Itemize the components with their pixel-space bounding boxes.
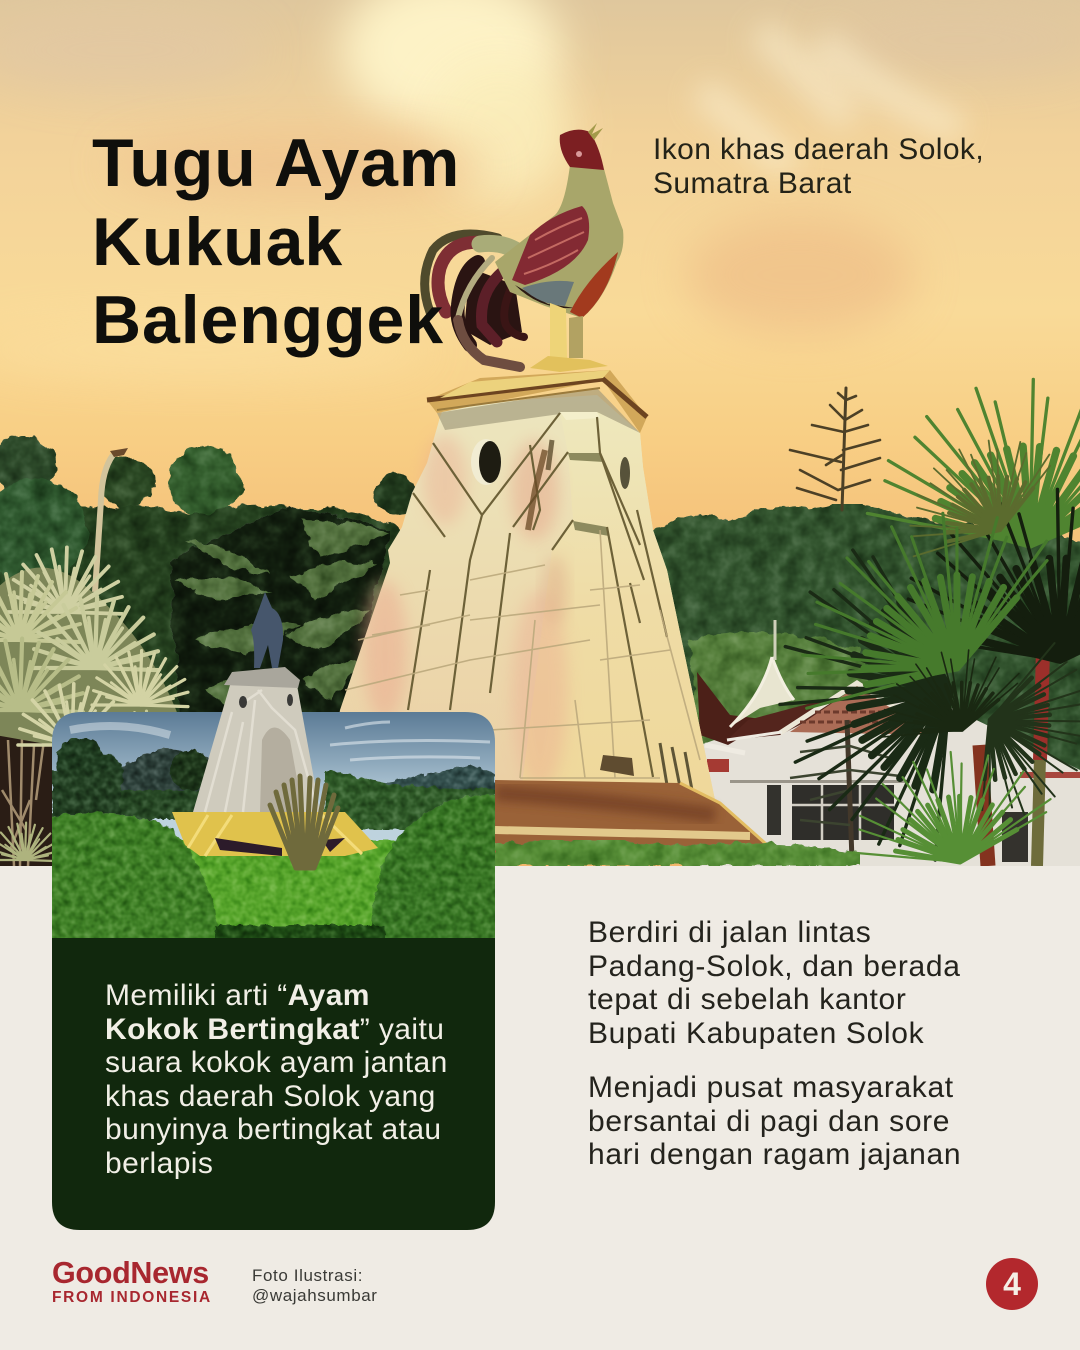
hedge at monument base bbox=[495, 840, 860, 866]
palm right bbox=[749, 370, 1080, 882]
text block: location bbox=[588, 916, 961, 1050]
hillside forest right bbox=[650, 504, 1080, 790]
text block: community centre bbox=[588, 1071, 961, 1171]
page number badge: 4 bbox=[1003, 1266, 1021, 1302]
card text: Kokok Bertingkat” yaitu bbox=[105, 1012, 444, 1046]
subtitle: Sumatra Barat bbox=[653, 166, 852, 200]
card text: Memiliki arti “Ayam bbox=[105, 979, 370, 1012]
logo: GoodNews from Indonesia bbox=[52, 1256, 212, 1306]
text block: location: Bupati Kabupaten Solok bbox=[588, 1017, 924, 1050]
title: Kukuak bbox=[92, 204, 343, 280]
lower green fan bbox=[836, 736, 1059, 881]
upper green fan bbox=[859, 370, 1080, 556]
card text: berlapis bbox=[105, 1146, 213, 1180]
head and comb bbox=[560, 130, 604, 170]
title bbox=[92, 125, 460, 358]
sky bbox=[0, 0, 1080, 866]
page number badge bbox=[986, 1258, 1038, 1310]
card bushes and lawn bbox=[40, 794, 500, 945]
card text bbox=[105, 979, 448, 1180]
dark mass bbox=[878, 475, 1080, 677]
spiky plant left bbox=[0, 547, 190, 866]
photo credit: @wajahsumbar bbox=[252, 1286, 378, 1305]
sparse pine right bbox=[790, 388, 880, 510]
logo: GoodNews from Indonesia: FROM INDONESIA bbox=[52, 1289, 212, 1306]
forest left bbox=[0, 435, 415, 740]
card photo bbox=[40, 712, 500, 945]
text block: community centre: bersantai di pagi dan sore bbox=[588, 1104, 950, 1138]
subtitle: Ikon khas daerah Solok, bbox=[653, 133, 984, 166]
dark lower fronds bbox=[756, 538, 979, 882]
monument cap bbox=[427, 370, 647, 433]
small monument above card bbox=[52, 592, 495, 1230]
card sky bbox=[52, 712, 495, 842]
olive left frond bbox=[878, 410, 1069, 576]
card text: suara kokok ayam jantan bbox=[105, 1046, 448, 1079]
card monument base steps bbox=[172, 812, 378, 856]
street lamp bbox=[95, 448, 128, 592]
stains and blush bbox=[512, 590, 568, 790]
title: Balenggek bbox=[92, 282, 444, 358]
logo: GoodNews from Indonesia: GoodNews bbox=[52, 1256, 209, 1290]
photo credit: Foto Ilustrasi: bbox=[252, 1266, 363, 1285]
main dark joints bbox=[408, 413, 667, 777]
text block: community centre: Menjadi pusat masyarakat bbox=[588, 1071, 954, 1104]
photo credit bbox=[252, 1266, 378, 1305]
panel: dark green text card bbox=[52, 900, 495, 1230]
shadow band under cap bbox=[437, 388, 640, 433]
middle green fan bbox=[749, 463, 1079, 743]
card text: khas daerah Solok yang bbox=[105, 1080, 436, 1112]
red chest bbox=[570, 252, 618, 318]
rumah gadang building bbox=[697, 620, 1080, 866]
title: Tugu Ayam bbox=[92, 125, 460, 201]
card palm shrub bbox=[270, 776, 338, 868]
clouds bbox=[0, 0, 1080, 380]
text block: location: Padang-Solok, dan berada bbox=[588, 950, 961, 983]
rooster statue bbox=[425, 123, 623, 372]
wing bbox=[512, 206, 589, 285]
text block: location: tepat di sebelah kantor bbox=[588, 983, 906, 1016]
text block: location: Berdiri di jalan lintas bbox=[588, 916, 871, 949]
tail feathers bbox=[464, 268, 522, 345]
small monument with statue bbox=[193, 592, 320, 812]
card text: bunyinya bertingkat atau bbox=[105, 1113, 442, 1146]
subtitle bbox=[653, 133, 984, 200]
faint panel joints bbox=[345, 530, 700, 778]
neck and body bbox=[495, 165, 623, 318]
card hills and trees bbox=[52, 738, 495, 830]
monument rusty base bbox=[495, 780, 775, 856]
legs and feet bbox=[550, 303, 567, 358]
hero photo: monument against sunset sky bbox=[0, 0, 1080, 866]
araucaria tree bbox=[170, 505, 390, 720]
round holes bbox=[471, 439, 501, 485]
base slits and chip bbox=[660, 743, 692, 790]
monument body bbox=[325, 388, 715, 800]
text block: community centre: hari dengan ragam jajanan bbox=[588, 1138, 961, 1171]
